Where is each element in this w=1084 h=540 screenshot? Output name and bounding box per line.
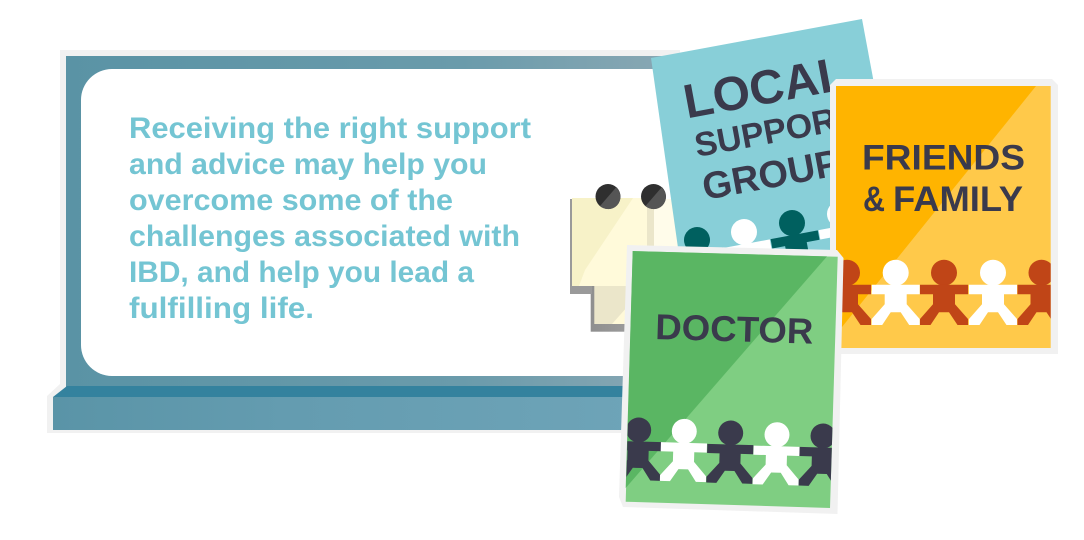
body text: challenges associated with bbox=[129, 220, 520, 253]
front note bbox=[572, 198, 647, 286]
doctor card border bbox=[619, 245, 844, 514]
local card background bbox=[651, 19, 905, 290]
board bbox=[47, 50, 721, 433]
pin right bbox=[641, 184, 666, 209]
friends card paper people bbox=[842, 260, 1051, 325]
friends card title bbox=[862, 138, 1025, 219]
doctor card title: DOCTOR bbox=[655, 306, 814, 352]
local card paper people bbox=[684, 206, 830, 250]
shelf top bbox=[53, 386, 640, 397]
friends card title: FAMILY bbox=[893, 180, 1023, 219]
doctor card paper people bbox=[626, 418, 832, 486]
back note bbox=[591, 280, 641, 332]
card: friends and family bbox=[823, 79, 1066, 354]
local card title: LOCAL bbox=[679, 47, 852, 129]
body text: and advice may help you bbox=[129, 148, 487, 181]
body text: fulfilling life. bbox=[129, 292, 314, 325]
body text: overcome some of the bbox=[129, 184, 453, 217]
doctor card background bbox=[626, 251, 838, 508]
local card title: GROUP bbox=[699, 142, 844, 209]
board outer edge bbox=[47, 50, 680, 433]
local card title: SUPPORT bbox=[692, 98, 860, 165]
sticky notes bbox=[570, 184, 690, 332]
front note shadow bbox=[570, 199, 592, 294]
board white panel bbox=[81, 69, 721, 376]
local card title bbox=[679, 47, 860, 209]
body text bbox=[129, 112, 531, 325]
friends card title: FRIENDS bbox=[862, 138, 1025, 178]
board frame bbox=[66, 56, 676, 388]
body text: IBD, and help you lead a bbox=[129, 256, 474, 289]
friends card title: & bbox=[863, 180, 885, 219]
card: local support group bbox=[651, 19, 874, 250]
body text: Receiving the right support bbox=[129, 112, 531, 145]
pin left bbox=[596, 184, 620, 209]
shelf front bbox=[53, 397, 643, 430]
right note bbox=[647, 199, 690, 289]
card: doctor bbox=[614, 245, 846, 514]
friends card background bbox=[836, 86, 1051, 348]
friends card border bbox=[830, 79, 1058, 354]
